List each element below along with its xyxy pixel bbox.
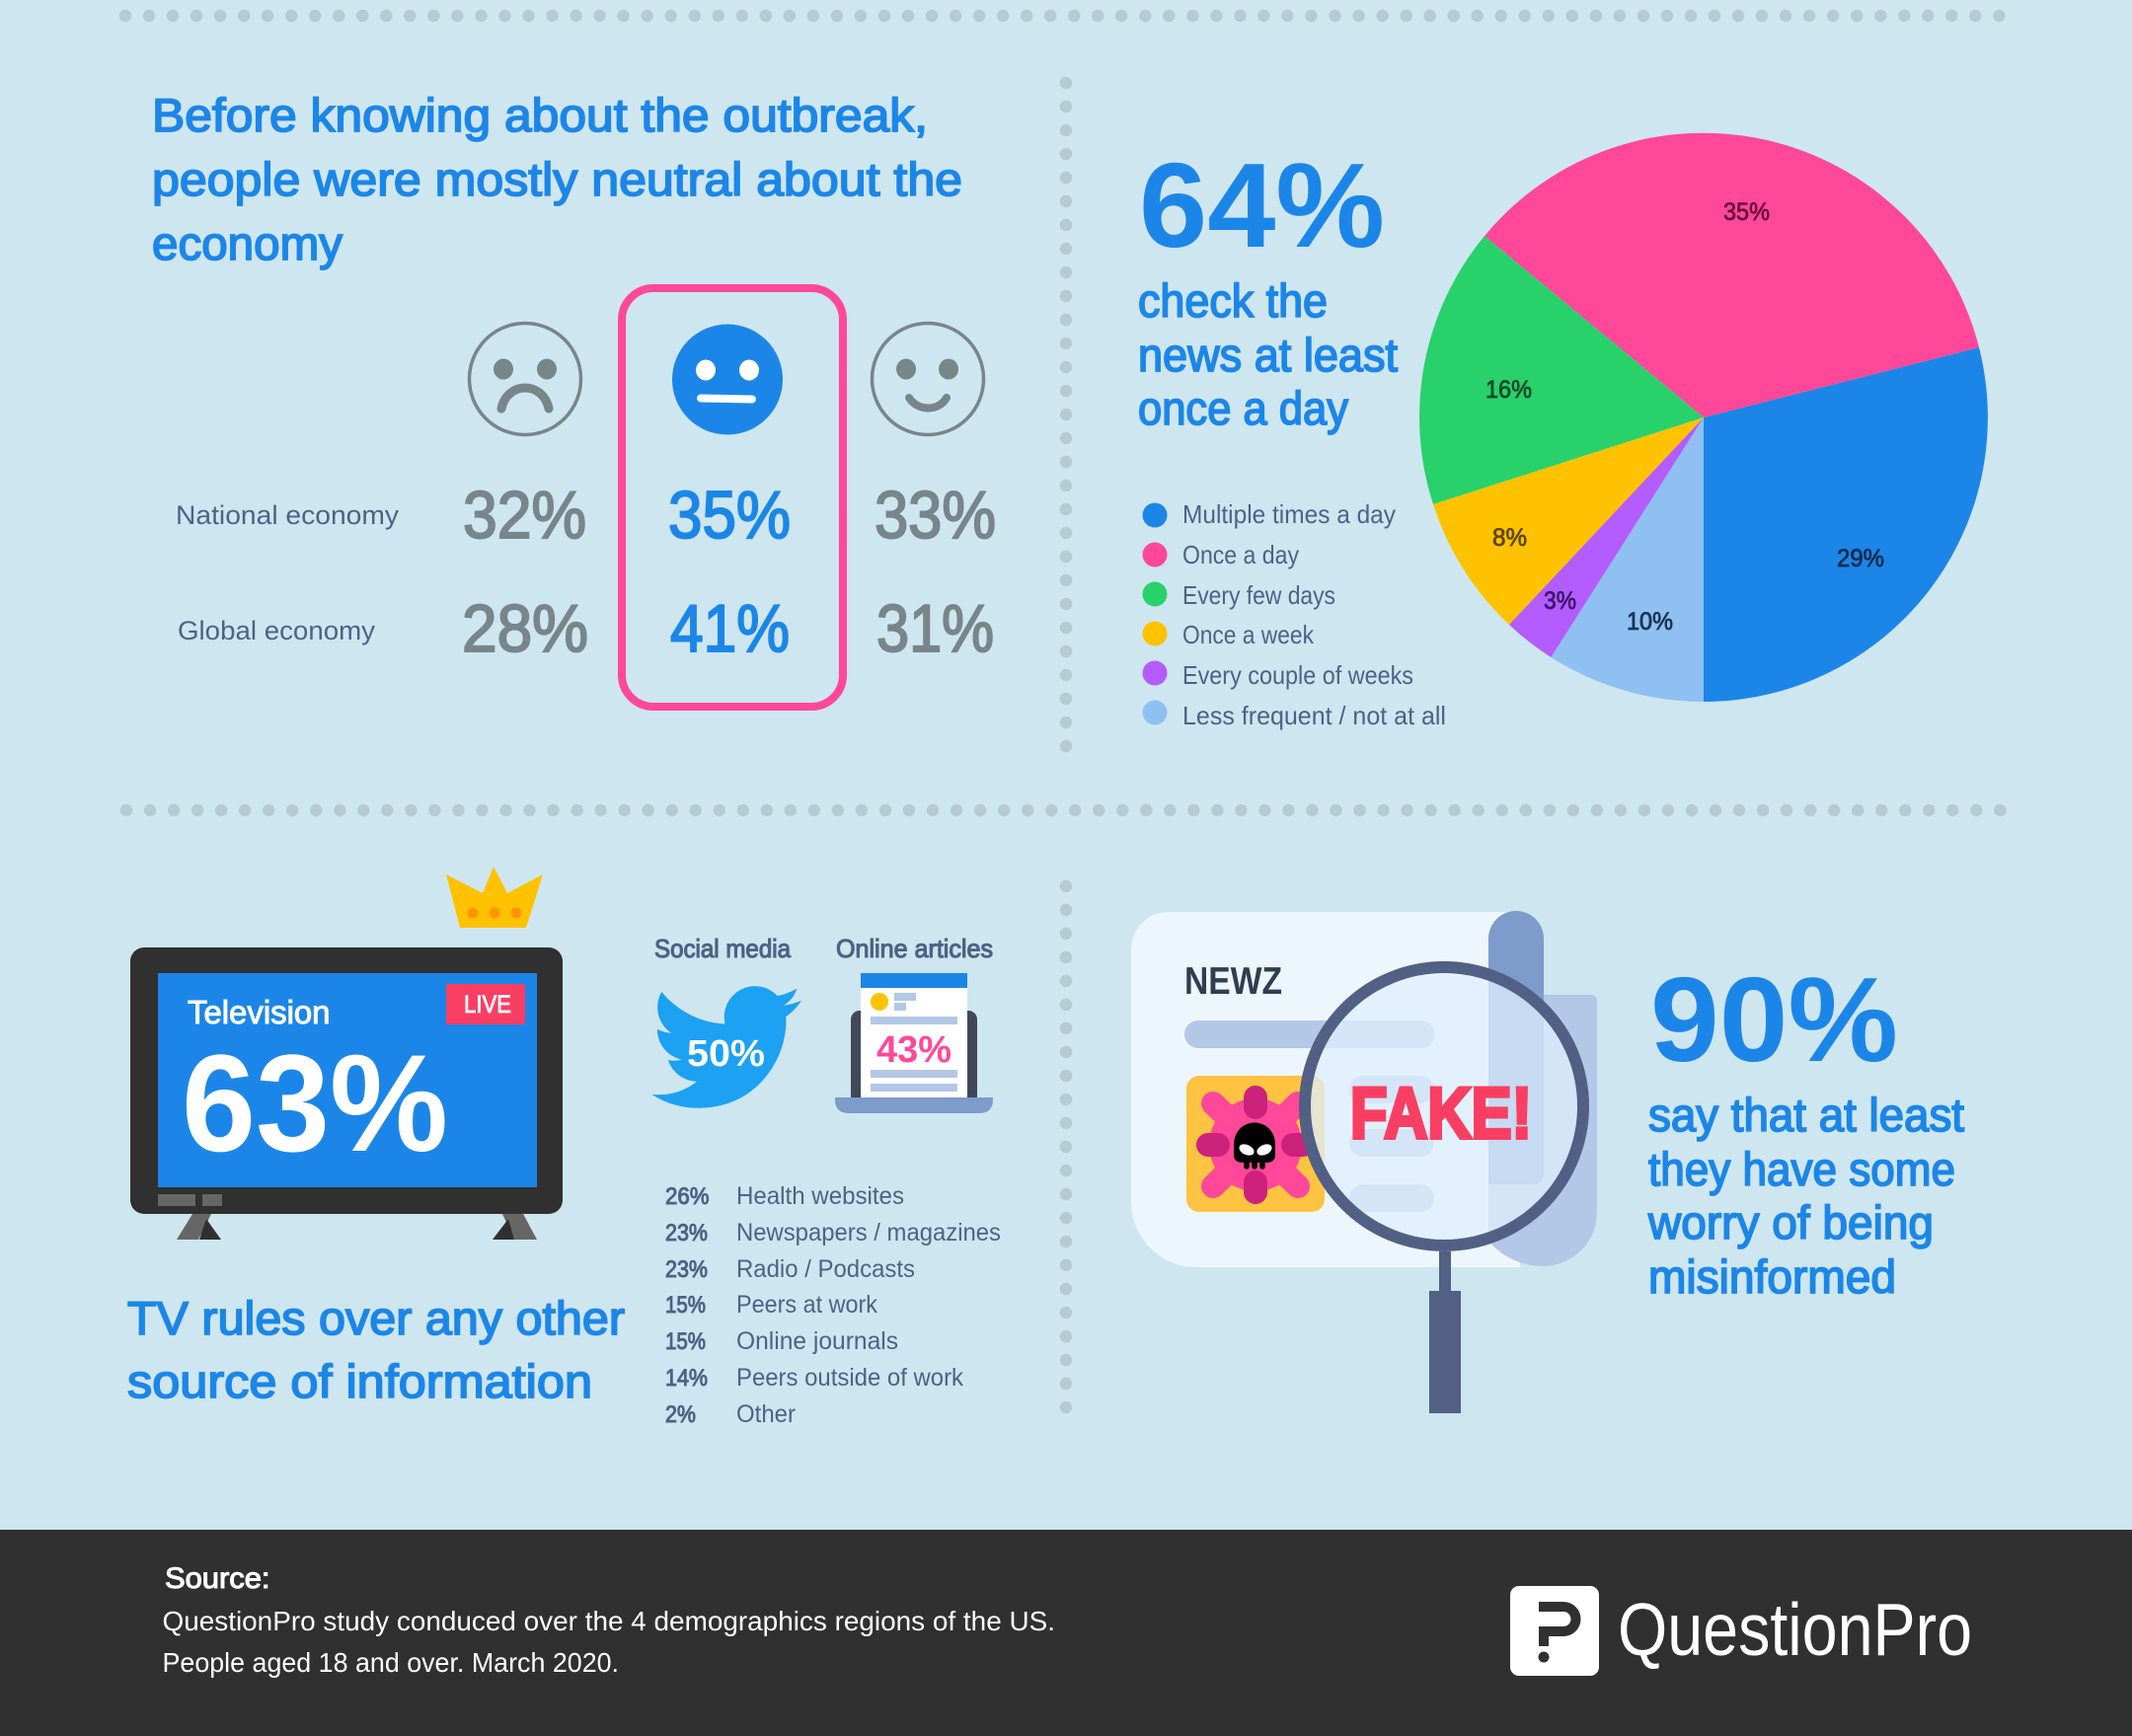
legend: Less frequent / not at all (1182, 701, 1446, 730)
text: misinformed: misinformed (1648, 1250, 1896, 1303)
icon: television: 63% (182, 1025, 448, 1180)
icon: happy face (873, 324, 983, 434)
icon: television: LIVE (464, 991, 511, 1019)
source text: People aged 18 and over. March 2020. (162, 1647, 619, 1678)
text: misinformed: worry of being (1647, 1196, 1934, 1248)
logo: QuestionPro: QuestionPro (1618, 1588, 1972, 1671)
legend (1143, 499, 1446, 730)
pie chart: 16% (1485, 376, 1532, 404)
list: other sources: 23% (665, 1220, 708, 1246)
text: misinformed: say that at least (1648, 1089, 1964, 1141)
row: global economy: 28% (462, 591, 588, 666)
row: global economy: 31% (876, 591, 994, 666)
list: other sources (665, 1182, 1001, 1428)
source text (162, 1562, 1055, 1678)
heading: TV rules (127, 1292, 625, 1407)
panel: information sources (127, 867, 1001, 1428)
panel: news frequency (1138, 133, 1988, 730)
pie chart: 35% (1723, 198, 1770, 226)
icon: magnifying glass (1305, 967, 1583, 1413)
row: national economy: 32% (463, 478, 586, 553)
row: global economy: 41% (670, 591, 790, 666)
list: other sources: 2% (665, 1401, 696, 1428)
pie chart: 3% (1544, 587, 1576, 615)
pie chart: 10% (1627, 608, 1673, 636)
heading: TV rules: source of information (127, 1355, 592, 1407)
label: fake: FAKE! (1350, 1074, 1532, 1154)
icon: television (130, 947, 563, 1240)
legend: Every couple of weeks (1182, 660, 1413, 690)
text: misinformed: they have some (1648, 1143, 1955, 1195)
legend: Multiple times a day (1182, 499, 1396, 529)
legend: Once a day (1182, 540, 1299, 569)
text: check the news: check the (1138, 274, 1328, 327)
big number: 90%: 90% (1650, 952, 1898, 1087)
footer (0, 1530, 2132, 1736)
list: other sources: Peers outside of work (736, 1364, 963, 1392)
heading: economy: people were mostly neutral about the (152, 153, 962, 205)
icon: television: Television (188, 994, 330, 1030)
icon: laptop article 43% (835, 973, 993, 1113)
icon: laptop article 43%: 43% (876, 1029, 952, 1071)
heading: economy: Before knowing about the outbreak, (152, 89, 928, 141)
panel: economy sentiment (152, 89, 996, 707)
row: national economy (176, 478, 996, 553)
illustration: newspaper (1131, 911, 1597, 1267)
icon: crown (446, 867, 543, 928)
row: global economy (178, 591, 994, 666)
highlight box: neutral column (622, 288, 843, 707)
row: national economy: 33% (875, 478, 996, 553)
logo: QuestionPro (1510, 1586, 1972, 1676)
list: other sources: 15% (665, 1292, 706, 1319)
source text: Source: (165, 1562, 270, 1595)
heading: economy (152, 89, 962, 269)
source text: QuestionPro study conduced over the 4 demographics regions of the US. (162, 1606, 1055, 1636)
icon: twitter bird 50%: 50% (687, 1033, 765, 1075)
label: online articles: Online articles (836, 934, 993, 963)
row: national economy: 35% (668, 478, 791, 553)
pie chart: 29% (1837, 545, 1884, 572)
text: check the news (1138, 274, 1398, 434)
text: check the news: once a day (1138, 382, 1348, 434)
label: social media: Social media (654, 934, 791, 963)
pie chart: 8% (1492, 524, 1527, 552)
row: global economy: Global economy (178, 616, 376, 645)
legend: Every few days (1182, 580, 1335, 610)
icon: sad face (470, 324, 580, 434)
list: other sources: 23% (665, 1256, 708, 1283)
panel: misinformation (1131, 911, 1964, 1413)
list: other sources: 26% (665, 1183, 709, 1210)
list: other sources: Online journals (736, 1327, 898, 1355)
list: other sources: Radio / Podcasts (736, 1255, 915, 1283)
list: other sources: Peers at work (736, 1291, 877, 1319)
heading: TV rules: TV rules over any other (127, 1292, 625, 1344)
icon: twitter bird 50% (651, 986, 801, 1108)
list: other sources: 15% (665, 1328, 706, 1355)
big number: 64%: 64% (1139, 138, 1385, 272)
text: misinformed (1647, 1089, 1964, 1303)
row: national economy: National economy (176, 500, 400, 530)
list: other sources: Newspapers / magazines (736, 1219, 1001, 1246)
illustration: newspaper: NEWZ (1184, 960, 1282, 1003)
list: other sources: Other (736, 1400, 796, 1428)
pie chart (1419, 133, 1988, 702)
icon: neutral face (672, 324, 783, 434)
list: other sources: 14% (665, 1365, 708, 1392)
heading: economy: economy (152, 217, 343, 269)
list: other sources: Health websites (736, 1182, 904, 1210)
icon: virus with skull (1208, 1097, 1303, 1192)
legend: Once a week (1182, 620, 1315, 649)
text: check the news: news at least (1138, 329, 1398, 381)
